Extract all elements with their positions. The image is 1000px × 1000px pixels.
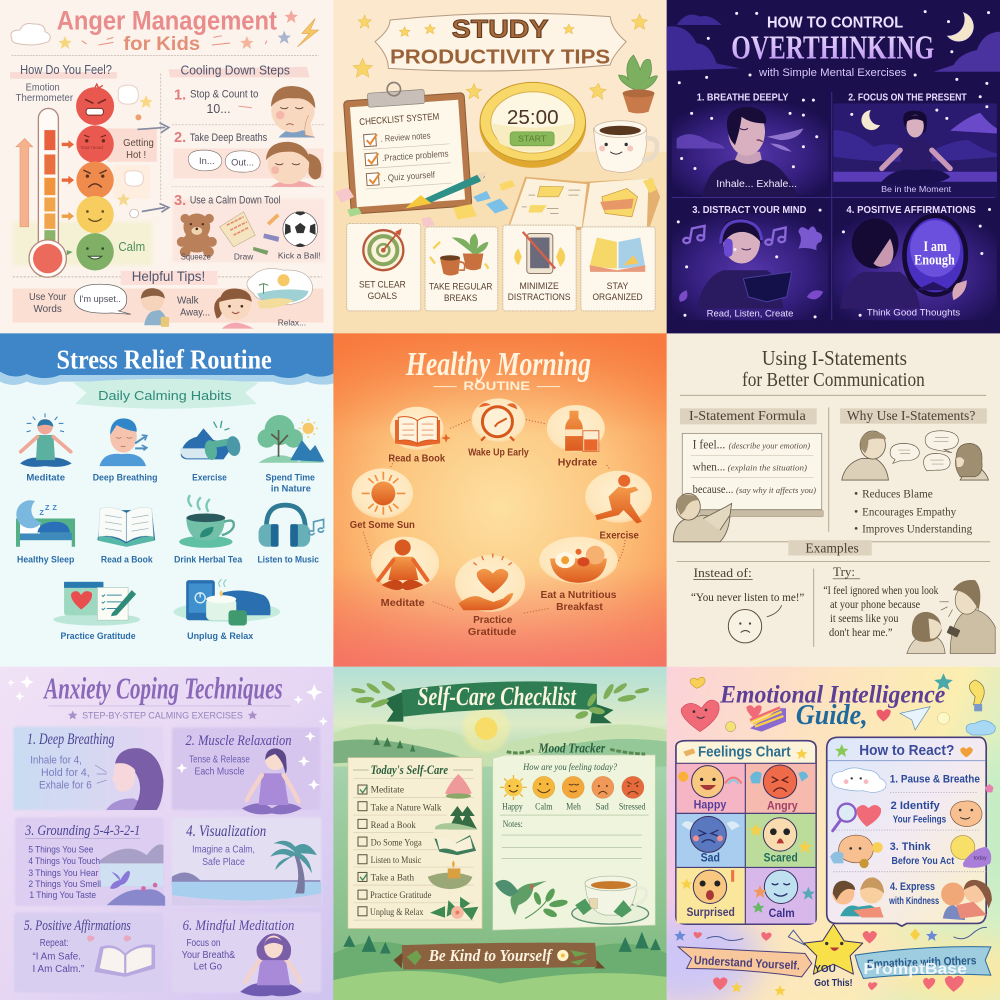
- icon: clouds: [117, 171, 143, 218]
- item: healthy sleep: [16, 500, 75, 564]
- card: set clear goals: GOALS: [368, 291, 397, 301]
- step 3: [173, 193, 325, 262]
- clipboard checklist: CHECKLIST SYSTEM: [359, 111, 440, 127]
- heading: formula: I-Statement Formula: [689, 409, 806, 424]
- card 4: visualization: 4. Visualization: [186, 823, 266, 840]
- banner: understand yourself: Understand Yourself.: [694, 953, 800, 973]
- title: anger management: [57, 5, 277, 55]
- arrow: to step 3: [142, 203, 169, 212]
- step: hydrate: Hydrate: [558, 458, 598, 469]
- section: distract your mind: Read, Listen, Create: [707, 308, 793, 318]
- card: minimize distractions: [503, 225, 576, 311]
- banner: understand yourself: [678, 947, 812, 977]
- card 2: muscle relaxation: Tense & Release: [189, 755, 250, 766]
- title ribbon: Self-Care Checklist: [418, 682, 577, 711]
- heading: cooling down steps: Cooling Down Steps: [180, 63, 290, 77]
- step: meditate: Meditate: [381, 598, 425, 609]
- card: mood tracker: Sad: [596, 801, 609, 811]
- icon: furious red face: [76, 84, 114, 125]
- card: set clear goals: [347, 224, 421, 311]
- step 3: Use a Calm Down Tool: [190, 194, 281, 206]
- step: meditate: [371, 537, 439, 609]
- card 6: mindful meditation: Your Breath&: [182, 950, 236, 961]
- title banner: PRODUCTIVITY TIPS: [390, 45, 610, 68]
- item: practice gratitude: [53, 582, 140, 641]
- panel: how to control overthinking: [666, 0, 1000, 334]
- star field over overthinking panel: [676, 10, 991, 318]
- title: STEP-BY-STEP CALMING EXERCISES: [82, 710, 243, 720]
- icon: neutral yellow face: [76, 196, 114, 233]
- decorative stars: [353, 14, 648, 99]
- item: practice gratitude: Practice Gratitude: [61, 631, 136, 641]
- icon: potted plant: [619, 55, 658, 113]
- chart: feelings chart: Scared: [764, 851, 798, 865]
- section: positive affirmations: Enough: [914, 253, 955, 269]
- example: try: “I feel ignored when you look: [823, 585, 939, 597]
- card 1: deep breathing: Hold for 4,: [41, 767, 90, 779]
- formula board: (explain the situation): [728, 463, 807, 473]
- item: herbal tea: [174, 495, 243, 564]
- icon: timer: [479, 82, 586, 168]
- step: read a book: [388, 407, 451, 464]
- section: helpful tips row: Walk: [177, 296, 200, 307]
- icon: timer: 25:00: [507, 107, 559, 129]
- step: get some sun: Get Some Sun: [350, 520, 415, 531]
- section: positive affirmations: [833, 205, 997, 320]
- card: today's self-care: Unplug & Relax: [370, 907, 424, 918]
- list: benefits: Reduces Blame: [862, 486, 933, 500]
- card: mood tracker: Notes:: [503, 819, 523, 829]
- section: positive affirmations: 4. POSITIVE AFFIRMATIONS: [846, 205, 976, 216]
- item: spend time in nature: in Nature: [271, 483, 311, 493]
- icon: teacher pointing: [673, 493, 732, 542]
- list: benefits: [854, 486, 972, 535]
- title: [405, 346, 591, 393]
- step: practice gratitude: Gratitude: [468, 627, 517, 638]
- step 1: Stop & Count to: [190, 88, 258, 100]
- sticky notes: [335, 180, 515, 227]
- section: how to react: Before You Act: [891, 856, 955, 867]
- card: today's self-care: Read a Book: [371, 820, 416, 831]
- landscape background: [333, 705, 667, 1000]
- banner: be kind to yourself: [393, 943, 605, 970]
- title: HOW TO CONTROL: [767, 14, 903, 31]
- step 3: 3.: [174, 193, 186, 209]
- heading: helpful tips: Helpful Tips!: [132, 268, 205, 284]
- card: mood tracker: Calm: [535, 801, 552, 811]
- card 5: positive affirmations: 5. Positive Affirmations: [24, 918, 131, 934]
- section: breathe deeply: 1. BREATHE DEEPLY: [697, 93, 789, 104]
- section: helpful tips row: Relax...: [278, 317, 306, 327]
- night clouds and stars: [667, 15, 1000, 72]
- title: with Simple Mental Exercises: [758, 67, 907, 79]
- card 4: visualization: Imagine a Calm,: [192, 845, 255, 856]
- card: today's self-care: Do Some Yoga: [371, 837, 422, 848]
- dotted connectors: [363, 418, 625, 614]
- card 1: deep breathing: Inhale for 4,: [30, 754, 82, 766]
- header wave: [0, 333, 334, 385]
- clipboard checklist: . Quiz yourself: [383, 170, 436, 183]
- card: today's self-care: Today's Self-Care: [371, 763, 448, 777]
- icon: cup of tea: [572, 876, 649, 924]
- step 3: Kick a Ball!: [278, 251, 321, 261]
- icon: calm green face: [76, 233, 114, 271]
- arrow: to step 1: [137, 123, 169, 133]
- step 2: Out...: [231, 157, 254, 167]
- card: today's self-care: Practice Gratitude: [370, 890, 431, 901]
- section: how to react: 4. Express: [890, 881, 935, 893]
- title: Healthy Morning: [405, 346, 591, 383]
- section: how to react: today: [974, 855, 987, 861]
- step: hydrate: [547, 405, 605, 469]
- icon: getting hot face: [76, 125, 114, 163]
- icon: smiling star: YOU: [814, 964, 836, 975]
- card 3: grounding: 3 Things You Hear: [28, 868, 98, 878]
- title: Emotional Intelligence: [719, 681, 945, 709]
- title: [43, 671, 290, 720]
- icon: angry orange face: [76, 161, 114, 199]
- step: wake up early: [468, 398, 529, 459]
- card: stay organized: ORGANIZED: [593, 292, 643, 302]
- step: exercise: Exercise: [600, 530, 639, 541]
- title: Stress Relief Routine: [57, 345, 272, 375]
- example: try: it seems like you: [830, 613, 899, 625]
- formula board: (say why it affects you): [736, 485, 816, 495]
- title banner: STUDY: [452, 16, 549, 43]
- step 3: Squeeze: [181, 252, 211, 262]
- item: healthy sleep: Z: [39, 508, 44, 517]
- icon: cloud and stars: [11, 10, 319, 49]
- label: getting hot: Getting: [123, 138, 154, 149]
- heading: how do you feel: How Do You Feel?: [20, 63, 112, 77]
- item: healthy sleep: Z: [52, 503, 57, 512]
- step 1: [174, 86, 315, 137]
- card 1: deep breathing: Exhale for 6: [39, 779, 92, 791]
- section: helpful tips row: [13, 269, 324, 329]
- item: unplug and relax: [173, 579, 280, 641]
- step 2: 2.: [174, 130, 186, 146]
- step: nutritious breakfast: Eat a Nutritious: [540, 590, 617, 601]
- card 3: grounding: [15, 817, 165, 906]
- decorative icons top: [681, 673, 995, 735]
- formula board: because...: [693, 482, 733, 496]
- card: mood tracker: [493, 740, 655, 930]
- card: mood tracker: Mood Tracker: [538, 740, 606, 755]
- step 2: [173, 130, 324, 187]
- item: spend time in nature: [258, 415, 324, 493]
- colour bands: [13, 128, 157, 265]
- card 6: mindful meditation: 6. Mindful Meditation: [183, 918, 294, 934]
- list: benefits: •: [854, 504, 858, 518]
- label: emotion thermometer: Emotion: [26, 83, 60, 94]
- section: helpful tips row: Words: [34, 304, 62, 315]
- card 5: positive affirmations: Repeat:: [40, 938, 68, 949]
- step: read a book: Read a Book: [388, 453, 445, 464]
- arrows: pointers to faces: [62, 140, 74, 255]
- heading: why use: Why Use I-Statements?: [847, 409, 975, 424]
- title: anger management: Anger Management: [57, 5, 277, 35]
- item: read a book: [97, 507, 155, 564]
- section: distract your mind: [672, 205, 828, 320]
- item: spend time in nature: Spend Time: [266, 473, 315, 483]
- step 3: Draw: [234, 252, 254, 262]
- section: breathe deeply: Inhale... Exhale...: [716, 179, 797, 190]
- card: take regular breaks: [425, 227, 498, 311]
- section: helpful tips row: Use Your: [29, 292, 67, 303]
- item: meditate: Meditate: [26, 473, 65, 483]
- section: how to react: 3. Think: [890, 841, 931, 853]
- step 1: 1.: [174, 87, 186, 103]
- banner: empathize with others: [855, 947, 991, 979]
- section: how to react: with Kindness: [888, 896, 939, 907]
- watermark: PromptBase: [863, 961, 967, 978]
- card 2: muscle relaxation: 2. Muscle Relaxation: [185, 733, 292, 749]
- pastel wash background: [613, 753, 1000, 1000]
- card 3: grounding: 1 Thing You Taste: [29, 890, 96, 900]
- item: herbal tea: Drink Herbal Tea: [174, 554, 243, 564]
- step: practice gratitude: Practice: [473, 615, 513, 626]
- card: take regular breaks: BREAKS: [444, 293, 477, 303]
- section: breathe deeply: [672, 93, 828, 197]
- label: getting hot: Hot !: [126, 150, 146, 161]
- subtitle ribbon: [73, 379, 259, 409]
- chart: feelings chart: Calm: [769, 906, 795, 920]
- title banner: [375, 13, 626, 71]
- list: benefits: Improves Understanding: [862, 521, 972, 535]
- panel: using i-statements: [666, 333, 1000, 667]
- card: minimize distractions: DISTRACTIONS: [508, 292, 570, 302]
- section: how to react: How to React?: [859, 743, 954, 759]
- card 3: grounding: 2 Things You Smell: [28, 879, 101, 889]
- example: try: [823, 565, 995, 654]
- chart: feelings chart: Angry: [767, 798, 798, 812]
- card: mood tracker: Stressed: [619, 801, 646, 811]
- label: calm: Calm: [118, 239, 145, 254]
- title: for Better Communication: [742, 369, 925, 391]
- icon: cloud with star near top face: [118, 85, 153, 120]
- icon: hummingbird: [495, 880, 568, 919]
- item: healthy sleep: Z: [45, 503, 50, 512]
- formula board: (describe your emotion): [729, 440, 810, 450]
- item: exercise: [180, 421, 242, 483]
- decorative doodles bottom: [674, 927, 987, 996]
- section: how to react: 2 Identify: [890, 800, 941, 812]
- sparkle background: [7, 675, 328, 726]
- card 1: deep breathing: 1. Deep Breathing: [27, 731, 115, 748]
- chart: feelings chart: [676, 741, 816, 924]
- step: get some sun: [350, 468, 415, 531]
- card 3: grounding: 4 Things You Touch: [28, 856, 100, 866]
- chart: feelings chart: Surprised: [686, 905, 735, 919]
- card: take regular breaks: TAKE REGULAR: [429, 282, 493, 292]
- item: deep breathing: Deep Breathing: [93, 473, 158, 483]
- section: helpful tips row: I'm upset..: [79, 294, 121, 304]
- card: stay organized: [581, 227, 655, 311]
- card 4: visualization: Safe Place: [202, 857, 245, 868]
- step 2: Take Deep Breaths: [190, 132, 267, 144]
- title: [731, 14, 934, 79]
- label: getting hot: [123, 138, 154, 161]
- card 2: muscle relaxation: Each Muscle: [194, 766, 245, 777]
- title: Guide,: [796, 700, 868, 731]
- card 6: mindful meditation: Focus on: [186, 938, 221, 949]
- card 3: grounding: 5 Things You See: [28, 844, 93, 854]
- item: healthy sleep: Healthy Sleep: [17, 554, 75, 564]
- example: try: Try:: [833, 565, 855, 579]
- section: distract your mind: 3. DISTRACT YOUR MIND: [692, 205, 807, 216]
- example: try: at your phone because: [830, 599, 920, 611]
- formula board: [682, 433, 823, 517]
- card 6: mindful meditation: [172, 912, 321, 996]
- card 6: mindful meditation: Let Go: [194, 962, 222, 973]
- panel: anxiety coping techniques: [0, 666, 334, 1000]
- label: emotion thermometer: Thermometer: [16, 93, 74, 104]
- title: [742, 348, 925, 391]
- icon: pencil: [405, 172, 486, 208]
- clipboard checklist: [342, 78, 472, 214]
- item: deep breathing: [93, 418, 158, 483]
- list: benefits: •: [854, 486, 858, 500]
- card: today's self-care: [348, 758, 482, 928]
- chart: feelings chart: Sad: [701, 851, 720, 865]
- formula board: when...: [693, 460, 725, 474]
- clipboard checklist: .Practice problems: [382, 149, 449, 163]
- card: set clear goals: SET CLEAR: [359, 280, 406, 290]
- card: today's self-care: Listen to Music: [371, 855, 421, 866]
- card: mood tracker: Meh: [566, 801, 581, 811]
- section: how to react: 1. Pause & Breathe: [890, 774, 980, 786]
- list: benefits: Encourages Empathy: [862, 504, 956, 518]
- icon: getting hot face: Your mood: [81, 145, 103, 150]
- panel: anger management for kids: [0, 0, 334, 334]
- card 1: deep breathing: [13, 727, 163, 810]
- icon: timer: START: [518, 133, 547, 143]
- title: ROUTINE: [463, 379, 530, 393]
- step 1: 10...: [206, 102, 231, 116]
- subtitle ribbon: Daily Calming Habits: [98, 389, 232, 403]
- icon: open notebook: [507, 177, 660, 230]
- card: today's self-care: Meditate: [371, 785, 404, 796]
- section: positive affirmations: I am: [923, 239, 947, 255]
- card 3: grounding: 3. Grounding 5-4-3-2-1: [24, 823, 140, 839]
- item: read a book: Read a Book: [101, 554, 153, 564]
- title: OVERTHINKING: [731, 29, 934, 66]
- chart: emotion thermometer: [29, 108, 66, 277]
- item: meditate: [20, 413, 72, 483]
- card 4: visualization: [172, 817, 321, 906]
- heading: examples: Examples: [805, 541, 859, 556]
- list: benefits: •: [854, 521, 858, 535]
- title: anger management: for Kids: [123, 33, 200, 55]
- card 5: positive affirmations: I Am Calm.”: [33, 964, 84, 975]
- title ribbon: [351, 679, 650, 723]
- example: instead of: [691, 566, 804, 643]
- item: headphones: [258, 505, 324, 564]
- banner: be kind to yourself: Be Kind to Yourself: [428, 946, 553, 965]
- section: how to react: Your Feelings: [893, 815, 946, 826]
- icon: smiling coffee mug: [594, 121, 657, 172]
- card: minimize distractions: MINIMIZE: [519, 281, 559, 291]
- card: stay organized: STAY: [607, 281, 629, 291]
- card 5: positive affirmations: “I Am Safe.: [33, 952, 81, 963]
- section: how to react: [827, 737, 994, 926]
- item: exercise: Exercise: [192, 473, 227, 483]
- example: instead of: Instead of:: [693, 566, 752, 580]
- example: try: don't hear me.”: [829, 627, 892, 639]
- section: positive affirmations: Think Good Thoughts: [867, 307, 961, 317]
- step: nutritious breakfast: [539, 537, 618, 613]
- panel: study productivity tips: [333, 0, 667, 334]
- chart: feelings chart: Feelings Chart: [698, 745, 791, 761]
- heading: examples: [788, 540, 872, 556]
- icon: smiling star: [804, 924, 863, 989]
- card: today's self-care: Take a Bath: [371, 872, 414, 883]
- card: mood tracker: Happy: [502, 801, 523, 811]
- icon: crescent moon: [947, 13, 973, 41]
- icon: smiling star: Got This!: [814, 978, 853, 989]
- step: exercise: [585, 471, 652, 541]
- section: focus on the present: [833, 93, 997, 197]
- label: emotion thermometer: [16, 83, 74, 104]
- step: nutritious breakfast: Breakfast: [556, 602, 604, 613]
- step: wake up early: Wake Up Early: [468, 448, 529, 459]
- title: [719, 681, 945, 731]
- section: focus on the present: Be in the Moment: [881, 184, 952, 194]
- title: Using I-Statements: [762, 348, 907, 370]
- card: today's self-care: Take a Nature Walk: [371, 802, 442, 813]
- item: unplug and relax: Unplug & Relax: [187, 631, 254, 641]
- arrow: rising anger: [16, 138, 33, 227]
- panel: emotional intelligence guide: [666, 666, 1000, 1000]
- section: focus on the present: 2. FOCUS ON THE PRESENT: [848, 93, 967, 104]
- step 2: In...: [199, 156, 215, 166]
- icon: two people talking: [842, 431, 989, 480]
- formula board: I feel...: [693, 437, 725, 451]
- panel: self-care checklist: [333, 666, 667, 1000]
- panel: healthy morning routine: [333, 333, 667, 667]
- chart: feelings chart: Happy: [694, 797, 727, 811]
- card 5: positive affirmations: [14, 912, 163, 993]
- card 2: muscle relaxation: [172, 727, 320, 814]
- section: helpful tips row: Away...: [180, 307, 210, 318]
- clipboard checklist: . Review notes: [380, 130, 431, 144]
- example: instead of: “You never listen to me!”: [691, 590, 804, 604]
- panel: stress relief routine: [0, 333, 334, 666]
- item: headphones: Listen to Music: [258, 554, 319, 564]
- banner: empathize with others: Empathize with Others: [867, 953, 977, 971]
- card: mood tracker: How are you feeling today?: [522, 762, 617, 773]
- step: practice gratitude: [455, 553, 525, 638]
